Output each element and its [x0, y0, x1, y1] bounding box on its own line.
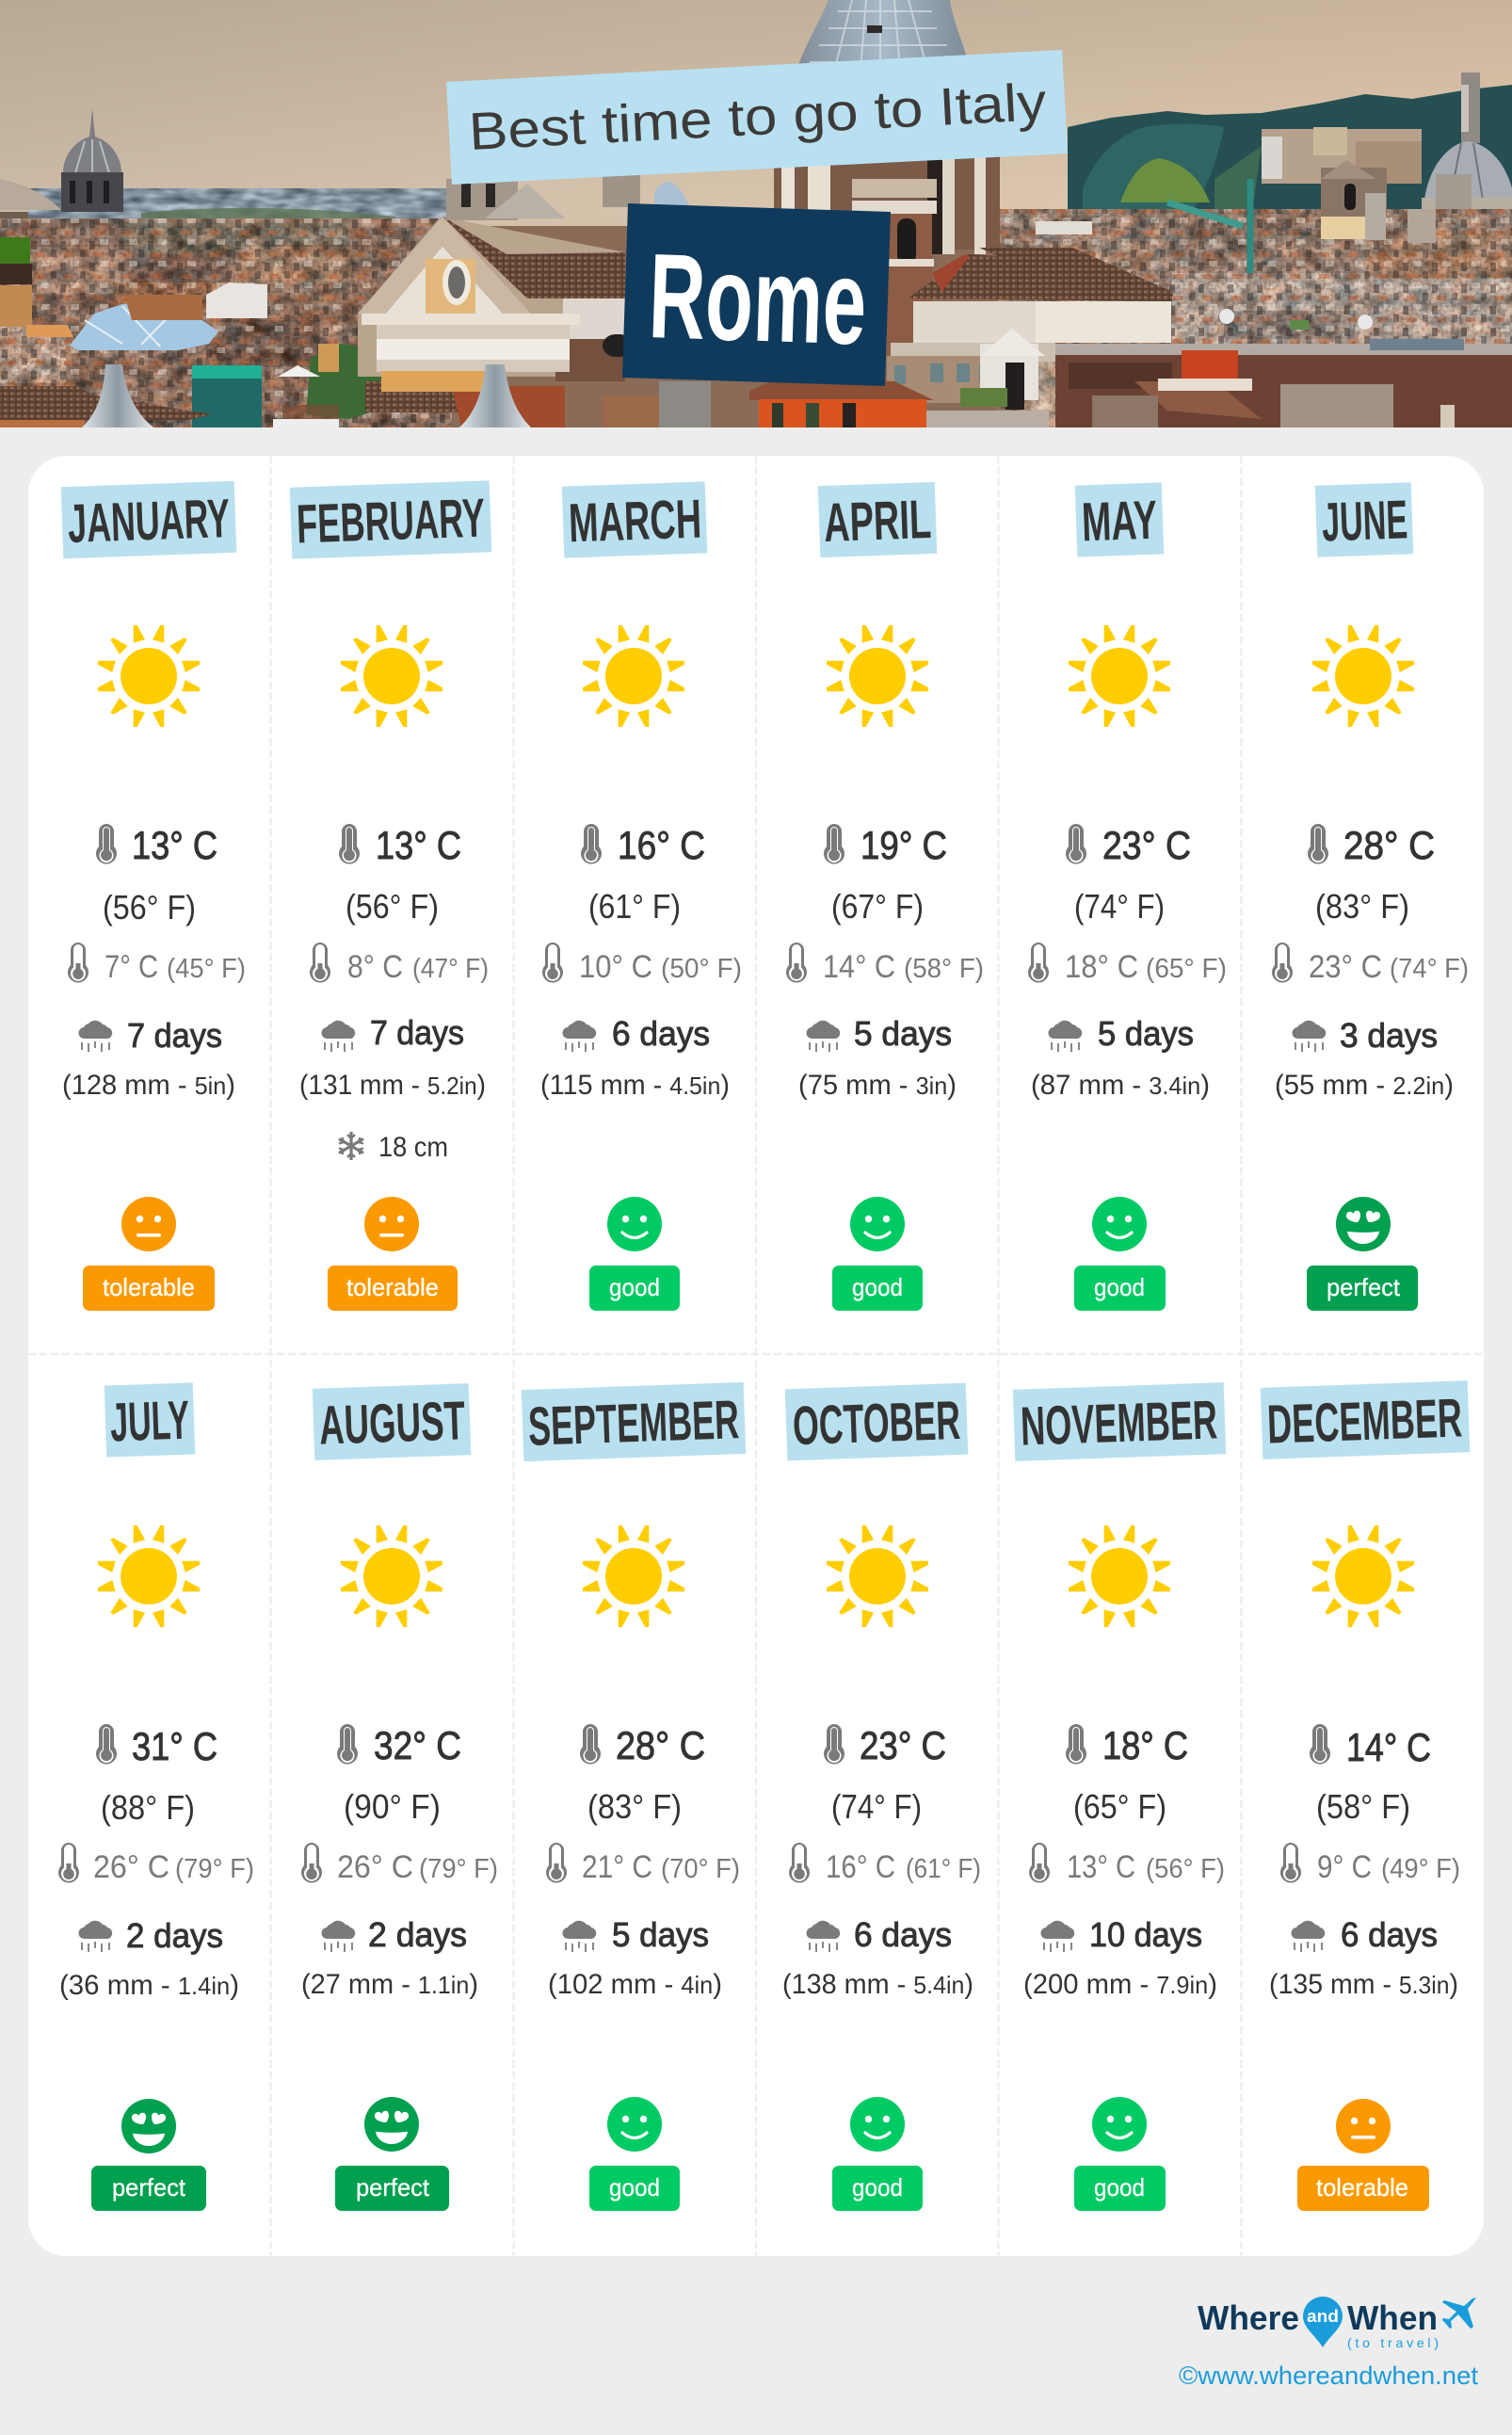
brick building right [1055, 339, 1512, 427]
month label [290, 480, 491, 559]
high temperature [96, 823, 217, 867]
high temperature [96, 1724, 217, 1768]
rainfall: (36 mm - 1.4in) [59, 1970, 239, 2001]
rainy days [1040, 1915, 1202, 1954]
low temperature: 9° C [1317, 1849, 1372, 1885]
low temperature: 26° C [337, 1849, 413, 1885]
rating badge: good [1094, 1273, 1145, 1301]
low temperature: (45° F) [167, 954, 246, 984]
cell: May [1028, 482, 1227, 1311]
rating badge [1074, 1266, 1166, 1311]
panel: monthly calendar card [28, 456, 1484, 2256]
rainy days [321, 1915, 467, 1954]
icon: face good [607, 1197, 662, 1251]
low temperature: 13° C [1067, 1849, 1135, 1885]
icon: sun [827, 1525, 928, 1627]
rating badge [328, 1266, 458, 1311]
rating badge [83, 1266, 215, 1311]
icon: face perfect [364, 2097, 419, 2152]
high temperature: 28° C [1343, 823, 1435, 867]
icon: sun [341, 1525, 442, 1627]
icon: face perfect [121, 2099, 176, 2153]
icon: sun [583, 625, 684, 727]
low temperature [789, 1843, 981, 1885]
icon: map pin [1303, 2297, 1343, 2347]
rainy days: 6 days [1341, 1915, 1438, 1954]
low temperature: 8° C [347, 949, 403, 985]
rainfall: (75 mm - 3in) [798, 1070, 957, 1101]
icon: face tolerable [364, 1197, 419, 1251]
cell: July [58, 1382, 254, 2211]
icon: left dome and drum [0, 108, 123, 212]
icon: sun [341, 625, 442, 727]
low temperature: (50° F) [661, 954, 742, 984]
high temperature fahrenheit: (74° F) [1074, 887, 1165, 926]
month label [61, 481, 236, 558]
icon: right dome [1422, 141, 1512, 241]
rainy days: 2 days [126, 1916, 223, 1955]
low temperature: (49° F) [1381, 1854, 1460, 1884]
icon: face tolerable [121, 1197, 176, 1251]
rainy days [806, 1915, 952, 1954]
month label [1013, 1382, 1226, 1461]
icon: second spire [459, 364, 531, 427]
high temperature fahrenheit: (58° F) [1316, 1787, 1410, 1826]
rating badge [91, 2166, 206, 2211]
icon: sun [98, 1525, 200, 1627]
rating badge [1297, 2166, 1429, 2211]
rainfall: (135 mm - 5.3in) [1269, 1969, 1458, 2000]
rating badge [1307, 1266, 1418, 1311]
rating badge: good [1094, 2173, 1145, 2201]
rating badge: perfect [112, 2173, 186, 2201]
rainfall: (138 mm - 5.4in) [782, 1969, 973, 2000]
title box: Rome: Rome [647, 229, 869, 370]
logo: Where and When: Where [1198, 2298, 1299, 2337]
high temperature: 18° C [1102, 1723, 1188, 1767]
low temperature [786, 943, 984, 985]
rainy days [562, 1014, 710, 1053]
icon: sun [827, 625, 928, 727]
high temperature: 23° C [1102, 823, 1191, 867]
rainy days: 6 days [612, 1014, 710, 1053]
icon: left spire [82, 364, 153, 427]
cell: September [522, 1382, 746, 2211]
low temperature [68, 943, 246, 985]
church facade [358, 217, 633, 392]
cell: March [540, 481, 742, 1311]
high temperature [580, 1723, 705, 1767]
high temperature fahrenheit: (61° F) [588, 887, 681, 926]
low temperature [310, 943, 489, 985]
high temperature: 13° C [132, 823, 217, 867]
rating badge [335, 2166, 449, 2211]
rating badge: good [609, 2173, 660, 2201]
bottom centre orange house [603, 377, 1049, 427]
low temperature [1029, 1843, 1225, 1885]
icon: face good [850, 2097, 905, 2152]
low temperature: 26° C [93, 1849, 169, 1885]
low temperature: (74° F) [1390, 954, 1469, 984]
high temperature: 13° C [376, 823, 461, 867]
high temperature fahrenheit: (74° F) [831, 1787, 922, 1826]
cell: June [1272, 482, 1469, 1311]
icon: face good [1092, 1197, 1147, 1251]
month label: JUNE [1321, 489, 1408, 554]
month label [1075, 482, 1164, 557]
rainy days [562, 1915, 709, 1954]
cell: April [786, 482, 984, 1311]
crane and bell tower right [1036, 160, 1436, 330]
high temperature [1308, 823, 1435, 867]
low temperature: 18° C [1065, 949, 1138, 985]
high temperature: 14° C [1346, 1725, 1431, 1769]
high temperature fahrenheit: (83° F) [1315, 887, 1409, 926]
ribbon: subtitle [446, 50, 1068, 185]
icon: face good [1092, 2097, 1147, 2152]
month label: MARCH [568, 489, 702, 554]
low temperature: (58° F) [904, 954, 984, 984]
high temperature: 28° C [616, 1723, 705, 1767]
high temperature fahrenheit: (56° F) [346, 887, 439, 926]
month label: OCTOBER [792, 1390, 961, 1457]
high temperature [1310, 1724, 1431, 1769]
rainy days: 6 days [854, 1915, 952, 1954]
high temperature fahrenheit: (90° F) [344, 1787, 441, 1826]
icon: sun [1312, 625, 1414, 727]
icon: sun [98, 625, 200, 727]
icon: face tolerable [1336, 2099, 1391, 2153]
icon: sun [1069, 625, 1170, 727]
ribbon: subtitle: Best time to go to Italy [467, 72, 1048, 161]
high temperature [824, 823, 947, 867]
month label [562, 481, 707, 558]
rainy days [321, 1013, 464, 1052]
low temperature [1028, 943, 1227, 985]
month label [522, 1382, 746, 1461]
month label: MAY [1081, 490, 1158, 553]
rainy days: 10 days [1089, 1915, 1202, 1954]
rainy days: 3 days [1340, 1016, 1438, 1055]
low temperature: (79° F) [419, 1854, 498, 1884]
rainy days: 7 days [127, 1016, 222, 1055]
low temperature: (56° F) [1146, 1854, 1225, 1884]
rating badge: tolerable [103, 1273, 195, 1301]
high temperature: 19° C [861, 823, 947, 867]
rating badge: tolerable [346, 1273, 439, 1301]
high temperature: 16° C [618, 823, 705, 867]
month label [1315, 482, 1413, 557]
rating badge [589, 1266, 680, 1311]
rating badge: perfect [356, 2173, 430, 2201]
high temperature [339, 823, 461, 867]
high temperature [1066, 823, 1191, 867]
website credit: ©www.whereandwhen.net [1179, 2362, 1478, 2390]
rainfall: (102 mm - 4in) [548, 1969, 722, 2000]
high temperature fahrenheit: (65° F) [1073, 1787, 1166, 1826]
low temperature: 21° C [582, 1849, 652, 1885]
central brick tower [774, 155, 1000, 356]
high temperature fahrenheit: (88° F) [101, 1788, 195, 1827]
high temperature [581, 823, 705, 867]
rainfall: (200 mm - 7.9in) [1023, 1969, 1217, 2000]
bright details left [0, 237, 565, 427]
cell: November [1013, 1382, 1226, 2211]
rainy days [78, 1016, 222, 1055]
month label [785, 1383, 968, 1460]
high temperature fahrenheit: (56° F) [103, 888, 196, 927]
icon: face perfect [1336, 1197, 1391, 1251]
month label [818, 482, 937, 557]
high temperature: 23° C [860, 1723, 946, 1767]
rating badge: good [852, 1273, 903, 1301]
left bell towers behind banner [446, 160, 690, 220]
high temperature: 31° C [132, 1724, 217, 1768]
rainfall: (27 mm - 1.1in) [301, 1969, 478, 2000]
rating badge [832, 2166, 923, 2211]
rainy days: 2 days [368, 1915, 467, 1954]
rating badge: good [609, 1273, 660, 1301]
rainy days: 5 days [1098, 1014, 1194, 1053]
rating badge: good [852, 2173, 903, 2201]
high temperature [337, 1723, 461, 1767]
icon: sun [1069, 1525, 1170, 1627]
rainy days: 7 days [370, 1013, 464, 1052]
title box: Rome [622, 203, 891, 386]
icon: face good [850, 1197, 905, 1251]
month label: AUGUST [318, 1390, 466, 1457]
rainfall: (131 mm - 5.2in) [299, 1070, 486, 1101]
month label: NOVEMBER [1020, 1389, 1218, 1458]
rainy days [1291, 1915, 1438, 1954]
icon: map pin: and [1307, 2307, 1339, 2326]
high temperature [1066, 1723, 1188, 1767]
month label: FEBRUARY [296, 488, 486, 555]
rating badge: tolerable [1316, 2173, 1408, 2201]
month label: JULY [109, 1390, 190, 1453]
low temperature [301, 1843, 498, 1885]
low temperature: 23° C [1309, 949, 1382, 985]
cell: February [290, 480, 491, 1311]
high temperature fahrenheit: (83° F) [587, 1787, 682, 1826]
rating badge [589, 2166, 680, 2211]
cell: December [1261, 1380, 1470, 2211]
rainy days: 5 days [612, 1915, 709, 1954]
icon: sun [1312, 1525, 1414, 1627]
logo: Where and When: (to travel) [1347, 2335, 1439, 2350]
low temperature [546, 1843, 740, 1885]
low temperature [542, 943, 742, 985]
low temperature [1272, 943, 1469, 985]
rainy days [1048, 1014, 1194, 1053]
rainy days [806, 1014, 952, 1053]
big tiled roof and white wall [887, 248, 1173, 410]
high temperature: 32° C [374, 1723, 461, 1767]
low temperature [1280, 1843, 1460, 1885]
icon: great central dome [791, 0, 976, 94]
high temperature fahrenheit: (67° F) [831, 887, 924, 926]
rainfall: (115 mm - 4.5in) [540, 1070, 730, 1101]
city mass [0, 209, 1512, 427]
rating badge: perfect [1327, 1273, 1401, 1301]
low temperature: 14° C [823, 949, 895, 985]
low temperature: (65° F) [1146, 954, 1227, 984]
rainy days [78, 1916, 223, 1955]
rainfall: (128 mm - 5in) [62, 1070, 235, 1101]
icon: face good [607, 2097, 662, 2152]
month label [313, 1383, 471, 1460]
cell: January [61, 481, 246, 1311]
low temperature: (47° F) [412, 954, 489, 984]
low temperature: 16° C [826, 1849, 895, 1885]
month label: JANUARY [67, 488, 231, 555]
low temperature [58, 1843, 254, 1885]
icon: airplane [1442, 2298, 1476, 2329]
logo: Where and When [1198, 2297, 1476, 2350]
rainy days [1292, 1016, 1438, 1055]
low temperature: (61° F) [906, 1854, 981, 1884]
rainfall: (55 mm - 2.2in) [1275, 1070, 1454, 1101]
cell: October [782, 1383, 981, 2211]
high temperature [824, 1723, 946, 1767]
logo: Where and When: When [1347, 2298, 1438, 2337]
rating badge [832, 1266, 923, 1311]
icon: sun [583, 1525, 684, 1627]
low temperature: 7° C [105, 949, 158, 985]
cell: August [301, 1383, 498, 2211]
rainfall: (87 mm - 3.4in) [1031, 1070, 1210, 1101]
month label [105, 1382, 195, 1458]
month label: APRIL [823, 489, 932, 554]
snowfall: 18 cm [378, 1132, 448, 1163]
low temperature: (70° F) [661, 1854, 740, 1884]
low temperature: 10° C [579, 949, 652, 985]
month label: SEPTEMBER [527, 1389, 740, 1458]
low temperature: (79° F) [175, 1854, 254, 1884]
snowfall [339, 1132, 448, 1163]
hero: Rome skyline photo [0, 0, 1512, 427]
rating badge [1074, 2166, 1166, 2211]
rainy days: 5 days [854, 1014, 952, 1053]
